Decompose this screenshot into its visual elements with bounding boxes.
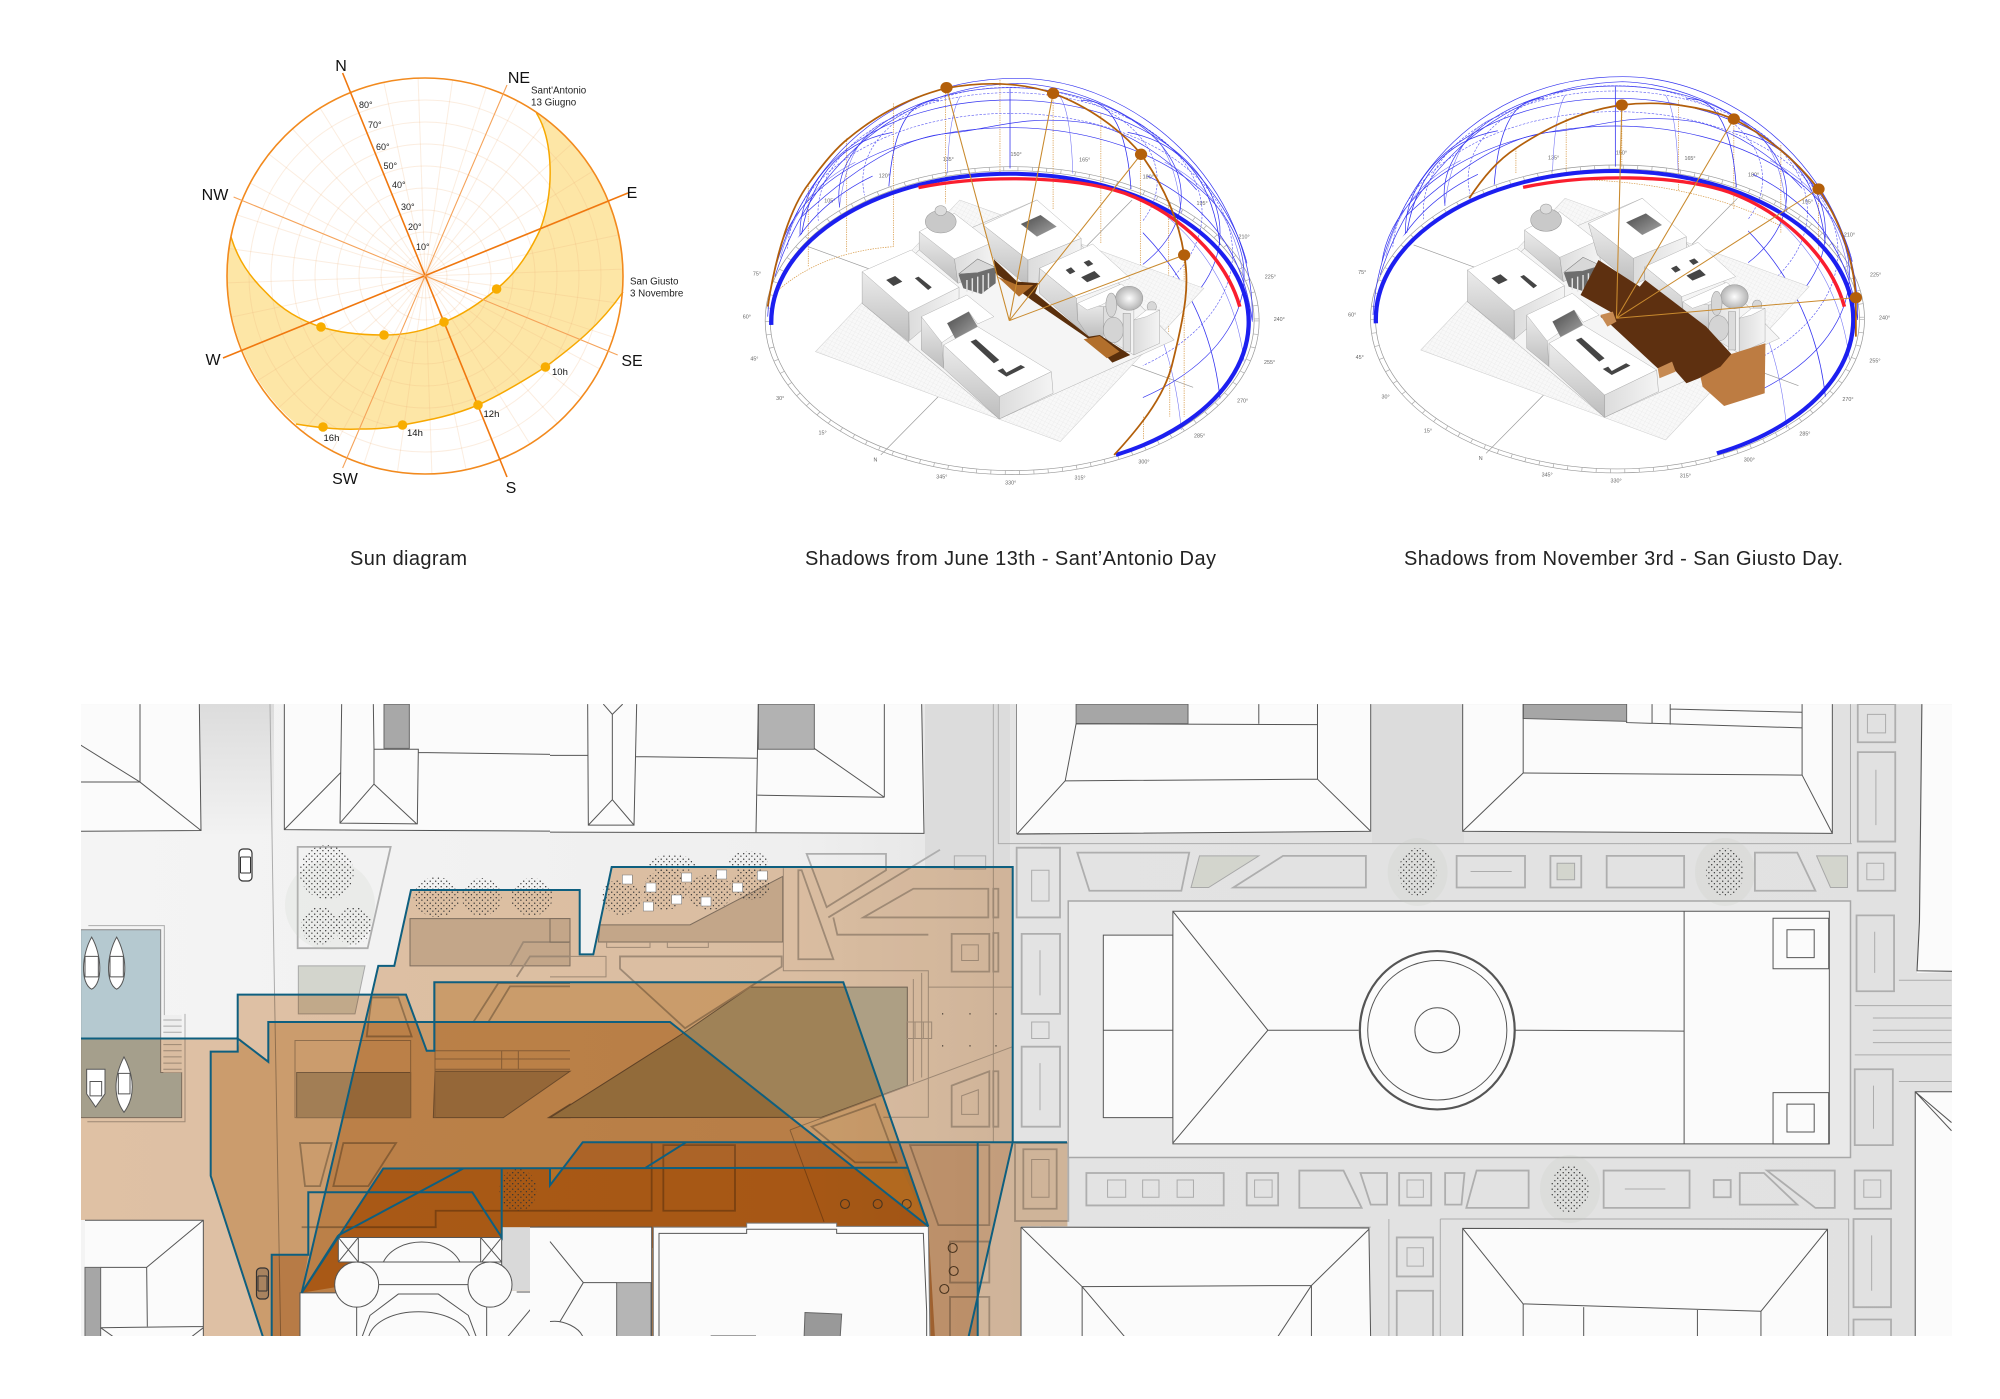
altitude labels: 80°	[359, 100, 373, 110]
corner towers	[1773, 918, 1829, 1144]
buildings: south row west and church	[85, 1220, 570, 1344]
degree labels: 270°	[1842, 397, 1854, 403]
degree labels: 210°	[1844, 233, 1855, 239]
shadow: right column	[890, 1142, 978, 1338]
sun position dots	[316, 284, 550, 432]
shadow: lightest	[81, 867, 1067, 1338]
shadow: second	[211, 1022, 935, 1338]
hour labels: 14h	[407, 428, 423, 439]
wireframe sky dome	[768, 78, 1252, 454]
azimuth ring	[765, 167, 1259, 475]
car: north	[239, 849, 252, 881]
buildings: south row east	[1021, 1227, 1828, 1344]
degree labels: 345°	[936, 474, 947, 480]
streets	[200, 704, 999, 869]
altitude labels: 30°	[401, 202, 415, 212]
planters	[298, 847, 391, 948]
wireframe sky dome	[1373, 77, 1858, 453]
sun path band between solstice curves	[227, 113, 624, 429]
degree labels: 105°	[824, 198, 835, 204]
degree labels: 165°	[1079, 158, 1090, 164]
degree labels: 240°	[1274, 317, 1285, 323]
degree labels: 135°	[943, 157, 954, 163]
compass labels: NE	[508, 70, 530, 87]
altitude labels: 10°	[416, 242, 430, 252]
buildings: north row east	[1017, 704, 1832, 834]
degree labels: 315°	[1680, 474, 1691, 480]
date note: San Giusto: 3 Novembre	[630, 288, 684, 300]
water basin	[81, 930, 182, 1118]
degree labels: N	[1479, 456, 1483, 462]
small round planters	[840, 1200, 958, 1294]
main monumental building with dome	[1103, 911, 1829, 1144]
far right edge buildings	[1914, 704, 1952, 1336]
degree labels: 75°	[753, 272, 761, 278]
boats	[84, 937, 132, 1112]
degree labels: 45°	[1356, 355, 1364, 361]
isometric buildings	[815, 200, 1204, 442]
compass labels: S	[506, 480, 516, 497]
cafe tables	[622, 870, 767, 911]
altitude labels: 60°	[376, 142, 390, 152]
ground	[81, 704, 1957, 1337]
date note: San Giusto: San Giusto	[630, 276, 679, 288]
degree labels: 225°	[1870, 273, 1881, 279]
car: south	[256, 1268, 268, 1299]
polar grid	[227, 78, 623, 474]
shadow layers	[81, 867, 1067, 1338]
terraces	[297, 1073, 411, 1118]
date note: Sant'Antonio: 13 Giugno	[531, 98, 577, 108]
altitude labels	[359, 100, 430, 252]
hour labels: 16h	[324, 433, 339, 444]
degree labels: 45°	[750, 357, 758, 363]
azimuth ring	[1371, 165, 1864, 473]
church	[300, 1227, 570, 1344]
degree labels: 300°	[1138, 459, 1149, 465]
stairs	[163, 1015, 182, 1073]
degree labels: 225°	[1265, 274, 1276, 280]
degree labels: 150°	[1616, 150, 1627, 156]
compass labels: N	[335, 58, 347, 75]
degree labels: 180°	[1748, 173, 1759, 179]
degree labels	[1348, 150, 1890, 485]
degree labels: 210°	[1239, 234, 1250, 240]
date note: Sant'Antonio: Sant'Antonio	[531, 86, 587, 96]
sun path with positions	[1469, 99, 1862, 337]
isometric buildings	[1421, 198, 1809, 440]
panel: sun diagram	[202, 58, 684, 497]
left section paving	[81, 704, 570, 1338]
solstice curves	[231, 113, 623, 429]
shadow: third	[300, 982, 935, 1338]
degree labels: 240°	[1879, 315, 1890, 321]
degree labels: 120°	[879, 174, 890, 180]
degree labels: 315°	[1074, 475, 1086, 481]
right plaza paving and plinth	[1041, 704, 1952, 1338]
panel: June 13th shadow dome	[743, 78, 1285, 486]
degree labels: 30°	[1382, 394, 1390, 400]
altitude labels: 70°	[368, 120, 382, 130]
degree labels: 180°	[1143, 174, 1154, 180]
degree labels: 30°	[776, 396, 784, 402]
buildings: south row centre	[530, 1223, 930, 1344]
trees	[285, 838, 1755, 1223]
degree labels: 195°	[1197, 201, 1208, 207]
degree labels: 165°	[1684, 156, 1696, 162]
panel: site plan with overlaid shadows	[81, 704, 1967, 1344]
degree labels: 195°	[1802, 199, 1813, 205]
altitude labels: 50°	[384, 161, 398, 171]
degree labels: 60°	[1348, 313, 1356, 319]
centre section paving	[550, 704, 1070, 1338]
solar rays	[946, 88, 1184, 321]
outer circle	[227, 78, 623, 474]
altitude labels: 20°	[408, 222, 422, 232]
buildings: north row centre	[550, 704, 1050, 834]
buildings: north row west	[81, 704, 570, 831]
compass labels: W	[205, 352, 221, 369]
altitude labels: 40°	[392, 180, 406, 190]
vertical projection lines	[1516, 100, 1819, 250]
panel: November 3rd shadow dome	[1348, 77, 1890, 485]
caption: sun diagram: Sun diagram	[350, 548, 467, 570]
shadow: fourth	[302, 1142, 928, 1293]
dome rings	[1360, 951, 1515, 1109]
degree labels: 60°	[743, 314, 751, 320]
horizon arcs	[1376, 171, 1853, 453]
degree labels: 285°	[1799, 432, 1810, 438]
degree labels: 15°	[1424, 429, 1432, 435]
teal shadow outlines	[81, 867, 1067, 1338]
compass labels	[202, 58, 643, 497]
degree labels: 255°	[1869, 358, 1880, 364]
degree labels: 255°	[1264, 360, 1275, 366]
compass labels: NW	[202, 187, 229, 204]
compass axes	[223, 73, 628, 477]
degree labels: 270°	[1237, 399, 1248, 405]
cast shadow	[1581, 260, 1765, 406]
hour labels: 12h	[484, 409, 499, 420]
solar rays	[1616, 105, 1856, 318]
degree labels: 285°	[1194, 433, 1205, 439]
hour labels	[324, 367, 568, 444]
degree labels: 330°	[1005, 480, 1016, 486]
sun path with positions	[768, 82, 1190, 455]
compass labels: SE	[621, 353, 643, 370]
vertical projection lines	[778, 80, 1184, 440]
degree labels: 345°	[1542, 473, 1553, 479]
degree labels: 300°	[1744, 458, 1755, 464]
degree labels: 150°	[1011, 152, 1022, 158]
compass labels: SW	[332, 471, 359, 488]
degree labels: 15°	[819, 430, 827, 436]
horizon arcs	[771, 174, 1249, 455]
degree labels	[743, 152, 1285, 486]
degree labels: 330°	[1611, 479, 1622, 485]
cast shadow	[994, 259, 1130, 363]
caption: November 3rd: Shadows from November 3rd - San Giusto Day.	[1404, 548, 1843, 570]
long palace	[653, 1223, 930, 1344]
compass labels: E	[627, 185, 637, 202]
degree labels: N	[873, 458, 878, 464]
hour labels: 10h	[552, 367, 568, 378]
degree labels: 75°	[1358, 270, 1366, 276]
shadow: darkest	[302, 1168, 928, 1293]
caption: June 13th: Shadows from June 13th - Sant’Antonio Day	[805, 548, 1216, 570]
degree labels: 135°	[1548, 155, 1559, 161]
